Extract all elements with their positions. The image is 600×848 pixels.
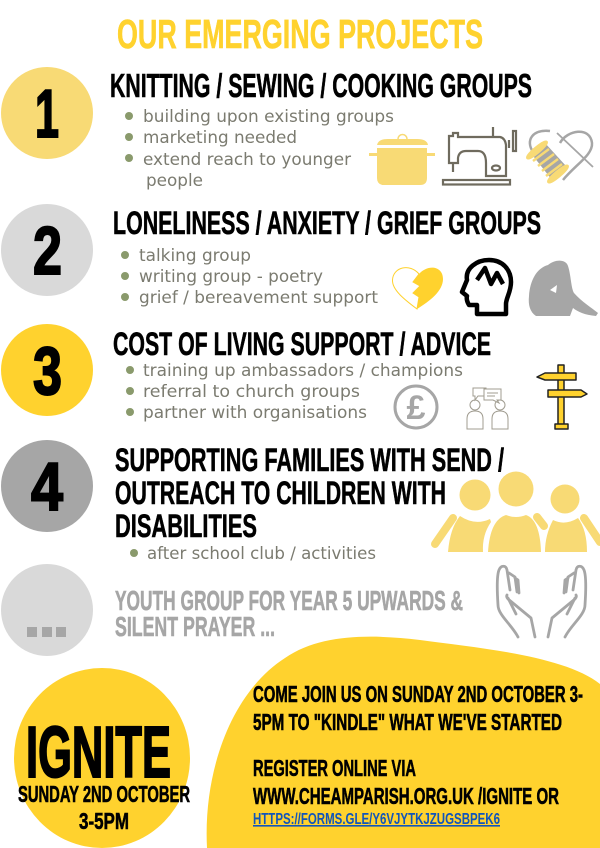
- bullet list 3: referral to church groups: [143, 382, 360, 402]
- number badge 1: 1: [35, 76, 59, 152]
- icon: broken heart: [392, 268, 443, 309]
- icon: sitting figure: [529, 261, 598, 316]
- icon: praying hands: [497, 566, 586, 637]
- panel: project 5: [1, 564, 586, 656]
- panel: project 3: [1, 324, 587, 429]
- call to action text: HTTPS://FORMS.GLE/Y6VJYTKJZUGSBPEK6: [253, 811, 500, 828]
- call to action text: [253, 681, 583, 828]
- icon: pound coin: £: [407, 389, 426, 427]
- ignite badge: [14, 668, 190, 848]
- yellow blob panel: [207, 637, 600, 848]
- icon: pound coin: [395, 386, 437, 428]
- bullet list 3: training up ambassadors / champions: [143, 361, 463, 381]
- number badge 3: 3: [33, 333, 62, 409]
- icon: two people talking: [467, 388, 508, 429]
- number badge 2: [1, 204, 93, 296]
- bullet list 1: people: [146, 171, 203, 191]
- bullet list 3: partner with organisations: [143, 403, 367, 423]
- panel: project 1: [1, 67, 593, 191]
- bullet list 1: extend reach to younger: [143, 150, 351, 170]
- ignite time: 3-5PM: [79, 808, 129, 834]
- heading: youth group: [115, 585, 463, 642]
- badge with dots: [1, 564, 93, 656]
- bullet list 2: grief / bereavement support: [139, 288, 378, 308]
- icon: signpost: [537, 365, 587, 429]
- bullet list 2: talking group: [139, 246, 251, 266]
- ignite date: SUNDAY 2ND OCTOBER: [18, 781, 190, 807]
- number badge 3: [1, 324, 93, 416]
- icon: head with brain wave: [462, 260, 511, 314]
- bullet list 1: marketing needed: [143, 128, 297, 148]
- number badge 4: [1, 440, 93, 532]
- call to action text: REGISTER ONLINE VIA: [253, 755, 416, 781]
- number badge 2: 2: [33, 213, 62, 289]
- bullet list 2: [121, 246, 378, 308]
- panel: project 4: [1, 440, 600, 564]
- icon: thread and needle: [526, 131, 593, 184]
- bullet list 3: [126, 361, 463, 423]
- heading: supporting families: OUTREACH TO CHILDREN WITH: [115, 475, 446, 511]
- ignite wordmark: IGNITE: [26, 713, 171, 793]
- bullet list 1: [125, 107, 394, 191]
- icon: cooking pot: [369, 134, 435, 185]
- icon: sewing machine: [443, 127, 516, 184]
- bullet list 1: building upon existing groups: [143, 107, 394, 127]
- number badge 4: 4: [31, 449, 63, 525]
- heading: supporting families: [115, 442, 504, 544]
- heading: supporting families: DISABILITIES: [115, 508, 257, 544]
- number badge 1: [1, 67, 93, 159]
- icon: group of people: [435, 472, 600, 552]
- panel: project 2: [1, 204, 598, 316]
- bullet list 4: after school club / activities: [147, 544, 376, 564]
- heading: youth group: SILENT PRAYER ...: [115, 611, 275, 642]
- bullet list 2: writing group - poetry: [139, 267, 323, 287]
